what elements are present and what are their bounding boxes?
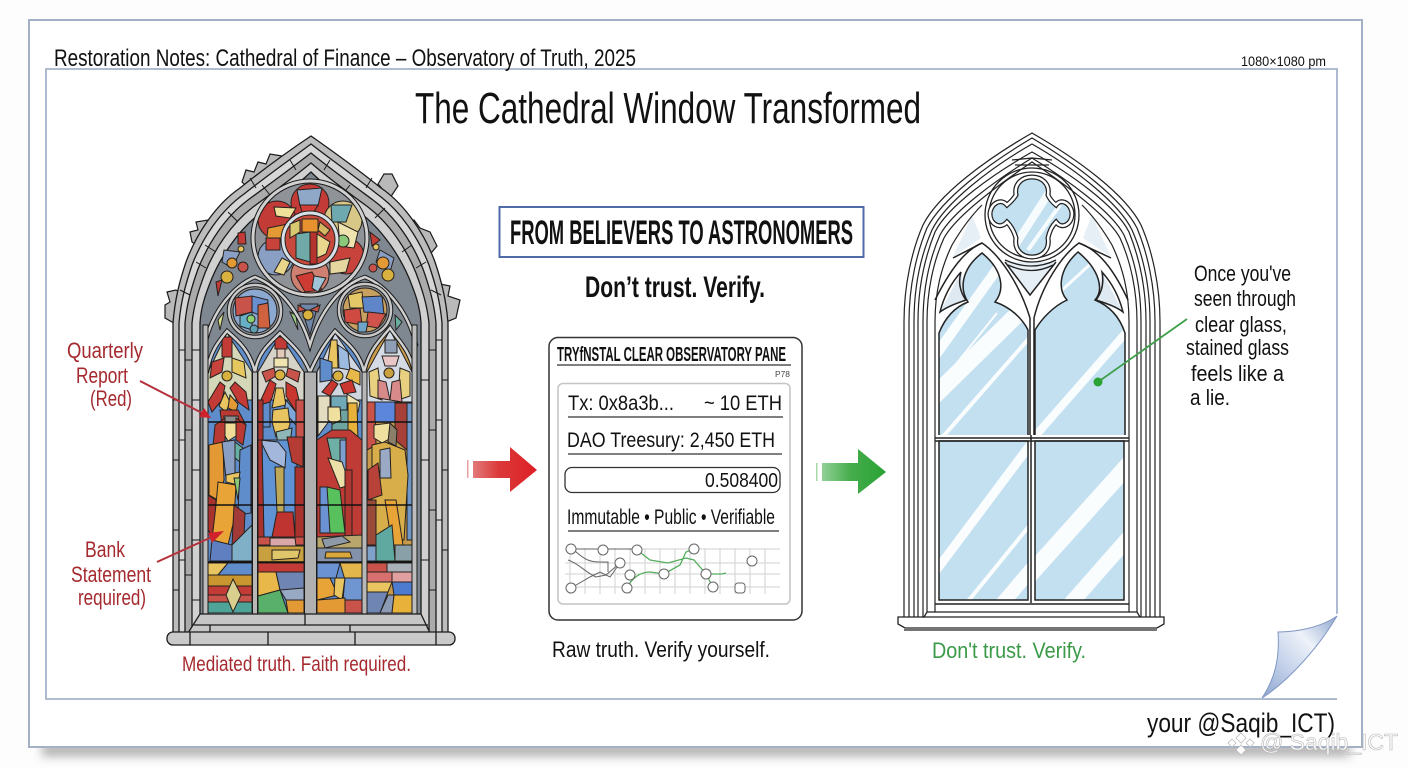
window muntins (935, 435, 1129, 604)
arrow: quarterly report pointer (140, 381, 211, 418)
arrow: bank statement pointer (157, 531, 224, 562)
callout text: seen through (1194, 286, 1296, 311)
watermark: @ Saqib_ICT (1260, 729, 1398, 755)
callout pointer (1094, 319, 1187, 386)
panel: stained glass window (165, 136, 460, 645)
panel: clear observatory pane (549, 338, 802, 620)
title: The Cathedral Window Transformed (415, 84, 921, 133)
transaction row: ~ 10 ETH (704, 392, 782, 415)
side rosettes (228, 283, 392, 338)
banner: from believers to astronomers (500, 207, 864, 257)
label: bank statement: Statement (71, 562, 151, 587)
label: quarterly report: Quarterly (67, 338, 143, 363)
lancet 2 glass (258, 330, 304, 615)
lancet 1 glass (208, 330, 252, 615)
stone tracery (205, 181, 416, 372)
inner frame (46, 69, 1337, 699)
header note: Restoration Notes: Cathedral of Finance – Observatory of Truth, 2025 (54, 45, 636, 72)
glass panes (939, 177, 1125, 600)
label: quarterly report: (Red) (90, 386, 132, 411)
callout text: feels like a (1191, 361, 1285, 386)
value field: 0.508400 (705, 470, 778, 492)
lancet tracery (935, 243, 1128, 435)
caption: raw truth: Raw truth. Verify yourself. (552, 637, 770, 662)
network chart (565, 544, 780, 594)
caption: don't trust verify: Don't trust. Verify. (932, 638, 1086, 663)
callout text: stained glass (1186, 335, 1289, 360)
label: quarterly report: Report (76, 363, 128, 388)
label: bank statement: required) (78, 585, 146, 610)
rose window (252, 180, 368, 296)
size note: 1080×1080 pm (1241, 53, 1326, 69)
arrow: green (816, 449, 886, 494)
callout text: a lie. (1190, 385, 1230, 410)
panel: clear glass window (898, 133, 1164, 630)
paper shadow (42, 744, 1350, 756)
lead transoms (204, 422, 415, 562)
treasury row: DAO Treesury: 2,450 ETH (567, 429, 775, 452)
stone joints (173, 160, 448, 600)
label: quarterly report (67, 338, 143, 411)
transaction row: Tx: 0x8a3b... (568, 392, 674, 415)
page curl (1262, 612, 1339, 699)
inner box (558, 384, 790, 604)
sill (167, 614, 455, 645)
value field (565, 468, 780, 492)
properties row: Immutable • Public • Verifiable (567, 506, 775, 529)
callout text: clear glass, (1195, 312, 1287, 337)
banner: from believers to astronomers: FROM BELIEVERS TO ASTRONOMERS (510, 214, 853, 252)
label: bank statement (71, 537, 151, 610)
pane title: TRYfNSTAL CLEAR OBSERVATORY PANE (557, 344, 786, 366)
handle note: your @Saqib_ICT) (1147, 708, 1335, 738)
spandrel glass (216, 232, 402, 335)
subheading: Don’t trust. Verify. (585, 271, 765, 304)
arrow: red (467, 447, 537, 492)
quatrefoil reflections (1018, 190, 1062, 251)
transaction row (568, 392, 783, 417)
page code: P78 (775, 370, 791, 379)
callout text (1186, 261, 1296, 410)
glass reflections (940, 264, 1124, 600)
lancet 3 glass (317, 330, 362, 615)
rose tracery (985, 158, 1079, 270)
watermark icon (1228, 733, 1254, 755)
mullions (203, 325, 417, 614)
caption: mediated truth: Mediated truth. Faith required. (182, 653, 411, 676)
window sill (898, 612, 1164, 630)
stone arch (173, 136, 448, 633)
callout text: Once you've (1194, 261, 1291, 286)
window frame arches (904, 133, 1160, 617)
lancet 4 glass (367, 330, 412, 615)
crockets (165, 154, 460, 324)
label: bank statement: Bank (85, 537, 126, 562)
